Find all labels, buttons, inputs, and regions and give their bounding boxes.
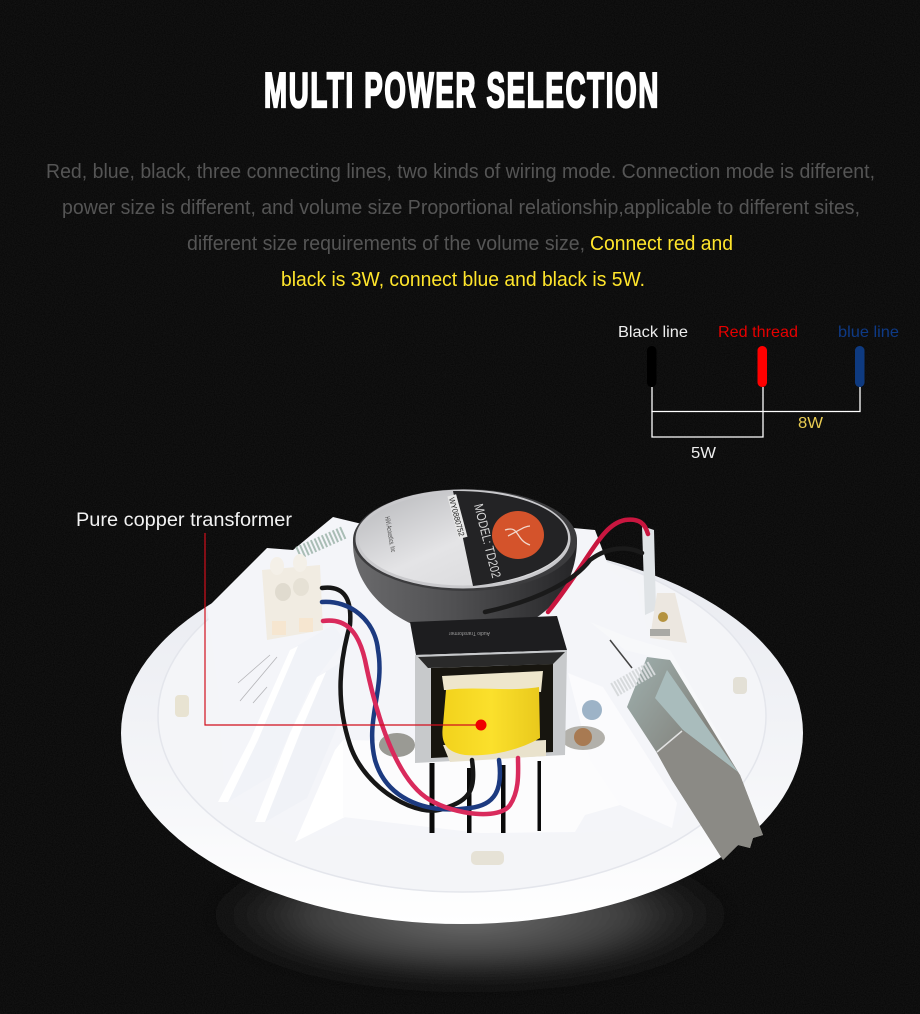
5W label: 5W — [691, 445, 717, 462]
right tab terminal — [642, 526, 687, 643]
5W bracket — [652, 387, 763, 437]
callout dot — [476, 720, 486, 730]
label: black line: Black line — [618, 324, 688, 341]
black wire end — [647, 346, 656, 387]
description line 1: Red, blue, black, three connecting lines, two kinds of wiring mode. Connection mode is different, — [46, 161, 875, 183]
right screw — [561, 726, 605, 750]
ventilation slots — [430, 761, 541, 833]
logo swoosh — [505, 526, 530, 545]
description line 3: different size requirements of the volume size, — [187, 233, 585, 255]
transformer frame — [415, 650, 567, 763]
highlighted text line 3: Connect red and — [590, 233, 733, 255]
grille dots bottom — [471, 851, 504, 865]
terminal block — [262, 554, 323, 640]
disc inner ring — [158, 540, 766, 892]
magnet cap black label — [453, 491, 568, 586]
coil bottom paper — [443, 740, 546, 762]
front spring — [614, 668, 652, 690]
upper right rib — [590, 622, 732, 757]
rib B — [255, 660, 345, 822]
red wire end — [758, 346, 767, 387]
callout leader line — [205, 533, 481, 725]
rib C — [295, 740, 345, 842]
label: red thread: Red thread — [718, 324, 798, 341]
label: blue line: blue line — [838, 324, 899, 341]
vent slits — [238, 655, 277, 703]
highlighted text line 4: black is 3W, connect blue and black is 5W. — [281, 269, 645, 291]
callout label: Pure copper transformer — [76, 510, 293, 531]
serial sticker: WY0880752 — [447, 496, 466, 538]
washer — [582, 700, 602, 720]
grille dots left — [175, 695, 189, 717]
coil paper — [442, 671, 543, 692]
transformer label top — [410, 616, 567, 655]
transformer wires — [322, 588, 518, 814]
magnet rim — [353, 489, 577, 591]
transformer window — [431, 664, 553, 758]
speaker wires right — [485, 520, 648, 612]
yellow coil tape — [442, 687, 540, 755]
metal clip — [627, 657, 763, 860]
description line 2: power size is different, and volume size Proportional relationship,applicable to different sites, — [62, 197, 860, 219]
transformer — [410, 616, 567, 763]
description text block — [46, 161, 875, 291]
transformer label text: Audio Transformer — [449, 630, 490, 636]
floor glow — [200, 840, 740, 990]
mounting body — [207, 517, 735, 838]
8W label: 8W — [798, 415, 824, 432]
rib A — [218, 625, 345, 802]
speaker product illustration — [121, 489, 803, 924]
left fins — [218, 625, 345, 842]
magnet cap silver — [357, 491, 569, 587]
blue wire end — [855, 346, 864, 387]
8W bracket — [652, 387, 860, 412]
magnet side — [353, 540, 577, 636]
brand text: HiVi Acoustics, Inc — [383, 516, 396, 553]
front block — [343, 740, 620, 833]
right raised rib — [568, 673, 677, 828]
outer disc — [121, 542, 803, 924]
speaker magnet — [353, 489, 577, 636]
frame bevel — [418, 652, 565, 668]
logo circle — [492, 511, 544, 559]
grille dots right — [733, 677, 747, 694]
model text: MODEL: TD202 — [471, 502, 504, 579]
back spring left — [298, 532, 345, 553]
rod — [610, 640, 632, 668]
left screw — [379, 733, 415, 757]
wiring diagram — [618, 324, 899, 462]
